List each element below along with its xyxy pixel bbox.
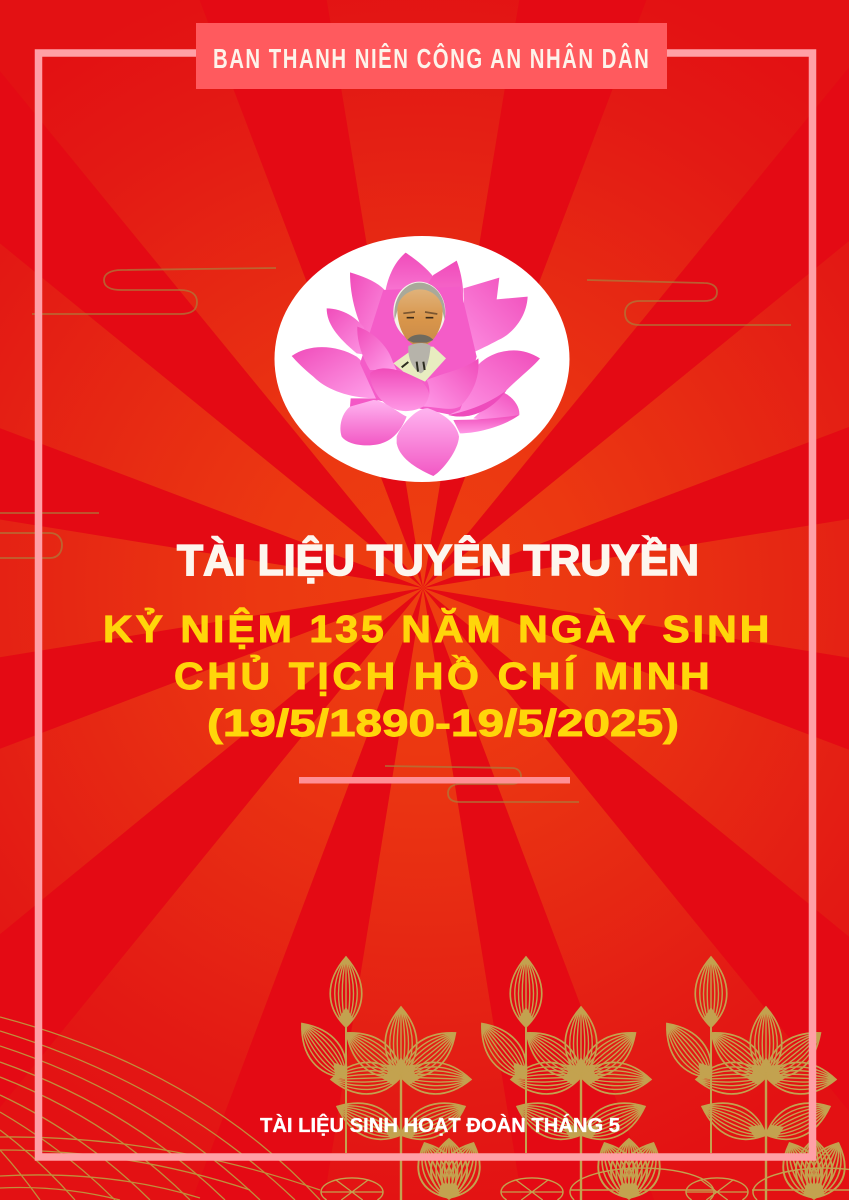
white circle [274,236,570,482]
divider bar [299,777,570,784]
header banner [196,23,667,89]
footer text: TÀI LIỆU SINH HOẠT ĐOÀN THÁNG 5 [260,1113,620,1137]
yellow subtitle: CHỦ TỊCH HỒ CHÍ MINH [174,654,710,698]
yellow subtitle: KỶ NIỆM 135 NĂM NGÀY SINH [103,608,769,651]
decorative cloud lines [0,268,791,802]
portrait emblem [274,236,570,482]
bottom left gold arcs [0,1017,320,1200]
yellow subtitle: (19/5/1890-19/5/2025) [207,703,679,745]
main title: TÀI LIỆU TUYÊN TRUYỀN [177,535,699,585]
gold lotus flowers [290,957,849,1200]
Bac Ho portrait [393,282,446,382]
yellow subtitle [103,608,769,745]
pink lotus [292,253,540,476]
header banner: BAN THANH NIÊN CÔNG AN NHÂN DÂN [213,43,649,75]
